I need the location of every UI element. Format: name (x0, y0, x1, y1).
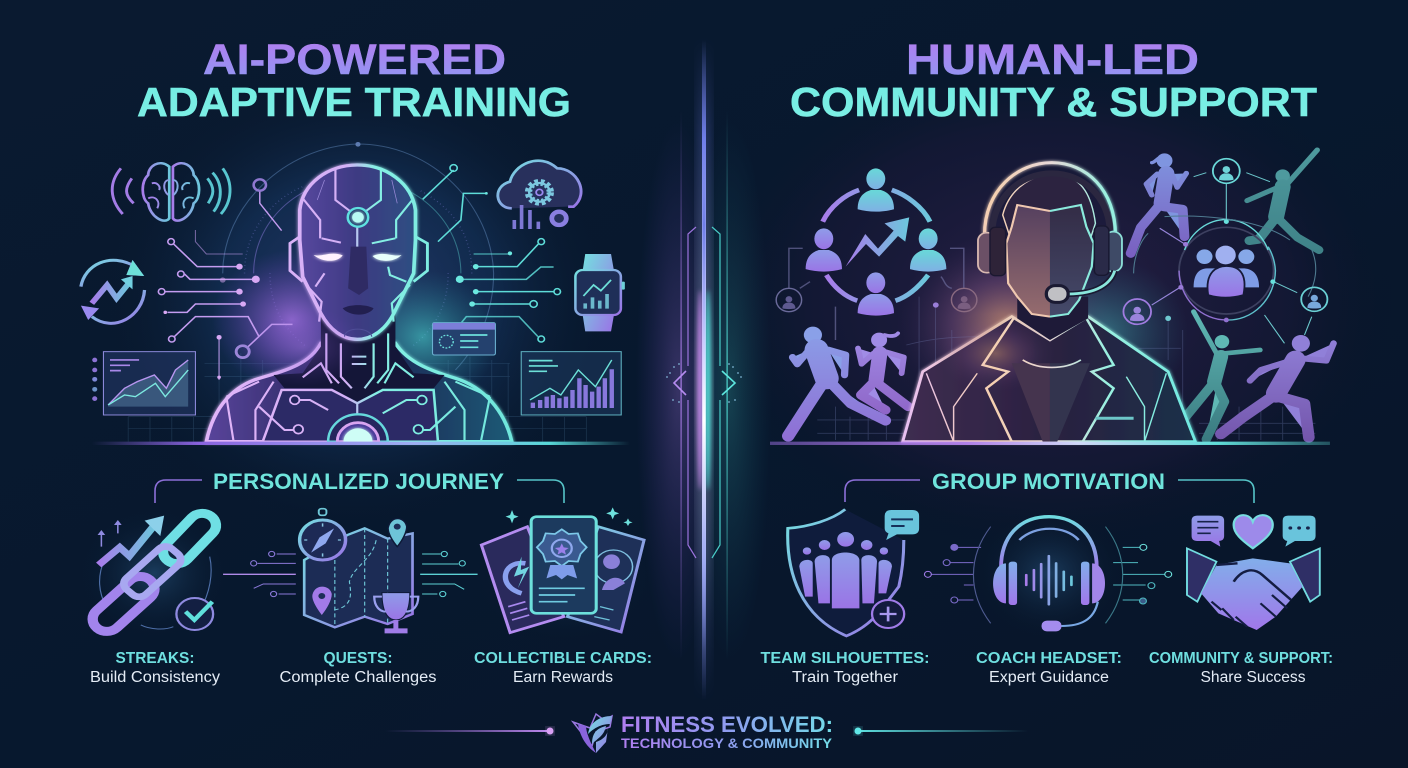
footer connector: right (854, 728, 1028, 734)
overlay glow on chest (241, 307, 365, 387)
icon: shield team (788, 509, 919, 636)
icon: brain waves (112, 168, 230, 214)
icon: brain (143, 163, 199, 221)
robot: ears (290, 237, 427, 282)
dancer bottom right (1179, 312, 1260, 439)
title: AI-powered adaptive training: ADAPTIVE TRAINING (137, 79, 571, 125)
caption: streaks (90, 650, 220, 686)
title: human-led community and support: COMMUNITY & SUPPORT (790, 79, 1317, 125)
coach: headset (978, 163, 1122, 302)
caption: coach headset (976, 650, 1122, 686)
card center (531, 517, 596, 613)
caption: community and support: COMMUNITY & SUPPORT: (1149, 650, 1333, 667)
robot: face circuits (303, 168, 414, 322)
robot: head (300, 165, 415, 339)
footer connector: left (385, 728, 554, 734)
robot: nose and mouth (348, 247, 368, 295)
footer title (621, 712, 833, 751)
icon: smartwatch (575, 254, 625, 331)
footer title: TECHNOLOGY & COMMUNITY (621, 735, 833, 751)
title: human-led community and support: HUMAN-LED (906, 36, 1199, 84)
circuit lines: right (423, 165, 560, 342)
icon: treasure map (304, 528, 413, 627)
caption: coach headset: COACH HEADSET: (976, 650, 1122, 667)
icon: handshake (1187, 548, 1320, 630)
icon glows (81, 510, 227, 637)
caption: community and support (1149, 650, 1333, 686)
icon glow (977, 510, 1122, 637)
background glow: human panel (705, 50, 1395, 550)
caption: quests: QUESTS: (324, 650, 392, 667)
caption: collectible cards: COLLECTIBLE CARDS: (474, 650, 652, 667)
icon: chat bubbles and heart (1192, 515, 1316, 548)
lower icons: right panel (788, 509, 1320, 637)
backdrop glows (897, 233, 1115, 420)
floor line (92, 442, 630, 445)
coach: jacket glow (934, 313, 1057, 393)
robot: eyes (314, 254, 402, 261)
lower icons: left panel (81, 507, 652, 640)
bracket (155, 480, 202, 503)
caption: team silhouettes: TEAM SILHOUETTES: (760, 650, 930, 667)
robot: neck (274, 313, 445, 402)
caption: community and support: Share Success (1200, 669, 1306, 686)
footer title: FITNESS EVOLVED: (621, 712, 833, 737)
robot: chest reactor (328, 414, 388, 442)
circuit lines: left (158, 179, 293, 380)
runner bottom right (1221, 335, 1334, 437)
caption: quests: Complete Challenges (280, 669, 437, 686)
title: human-led community and support (790, 36, 1317, 125)
robot: chest plate (263, 390, 438, 442)
speech bubble (885, 510, 919, 540)
icon: headset with waveform (993, 517, 1105, 631)
subheading: personalized journey: PERSONALIZED JOURNEY (213, 469, 504, 494)
info card (433, 323, 495, 355)
group hub (1134, 173, 1316, 343)
icon: check badge (176, 598, 213, 630)
jumper top right (1247, 150, 1319, 250)
orbit rings (223, 144, 494, 370)
coach: face (1006, 205, 1094, 317)
caption: team silhouettes: Train Together (792, 669, 898, 686)
icon: chain streak (87, 508, 222, 637)
chart panel: left (92, 352, 195, 415)
divider glow (636, 120, 720, 660)
illustration: human panel (770, 150, 1334, 445)
small contact icons left (776, 248, 977, 340)
floor line (770, 442, 1330, 445)
caption: quests (280, 650, 437, 686)
caption: streaks: Build Consistency (90, 669, 220, 686)
caption: coach headset: Expert Guidance (989, 669, 1109, 686)
coach: shirt and lapels (926, 318, 1166, 442)
subheading: group motivation: GROUP MOTIVATION (932, 469, 1165, 494)
coach: jacket (903, 317, 1195, 442)
team network cycle (806, 168, 946, 316)
illustration: AI panel (81, 142, 630, 445)
plus badge (872, 600, 904, 628)
caption: streaks: STREAKS: (116, 650, 194, 667)
title: AI-powered adaptive training: AI-POWERED (203, 36, 506, 84)
icon: cycle arrows (81, 260, 145, 323)
icon: trophy (374, 593, 418, 633)
coach: hair (1003, 175, 1095, 240)
card right (568, 527, 644, 632)
connector lines: quests left (223, 551, 296, 597)
icon: map pins (312, 519, 407, 615)
icon: collectible cards (481, 507, 644, 633)
caption: team silhouettes (760, 650, 930, 686)
runners left (788, 327, 908, 436)
icon: cloud with gears (498, 161, 581, 229)
caption: collectible cards (474, 650, 652, 686)
robot: body and shoulders (206, 343, 512, 442)
background grid (128, 340, 586, 442)
subheading: personalized journey (155, 469, 564, 503)
background lines (817, 297, 1315, 440)
icon: compass (300, 509, 346, 560)
robot: third eye (348, 208, 368, 227)
icon: footer logo (573, 714, 612, 753)
background glow: robot halo (67, 65, 647, 535)
caption: collectible cards: Earn Rewards (513, 669, 613, 686)
chest glows (212, 250, 372, 390)
connector lines: headset (924, 527, 991, 623)
card left (481, 527, 564, 633)
center divider (636, 40, 772, 700)
coach: neck (1017, 297, 1088, 340)
sparkles (506, 507, 633, 526)
title: AI-powered adaptive training (137, 36, 571, 125)
chart panel: right (521, 352, 621, 415)
runner top right (1131, 153, 1186, 253)
contact icons around hub (1123, 159, 1327, 324)
subheading: group motivation (845, 469, 1254, 503)
connector lines: quests right (420, 551, 478, 597)
